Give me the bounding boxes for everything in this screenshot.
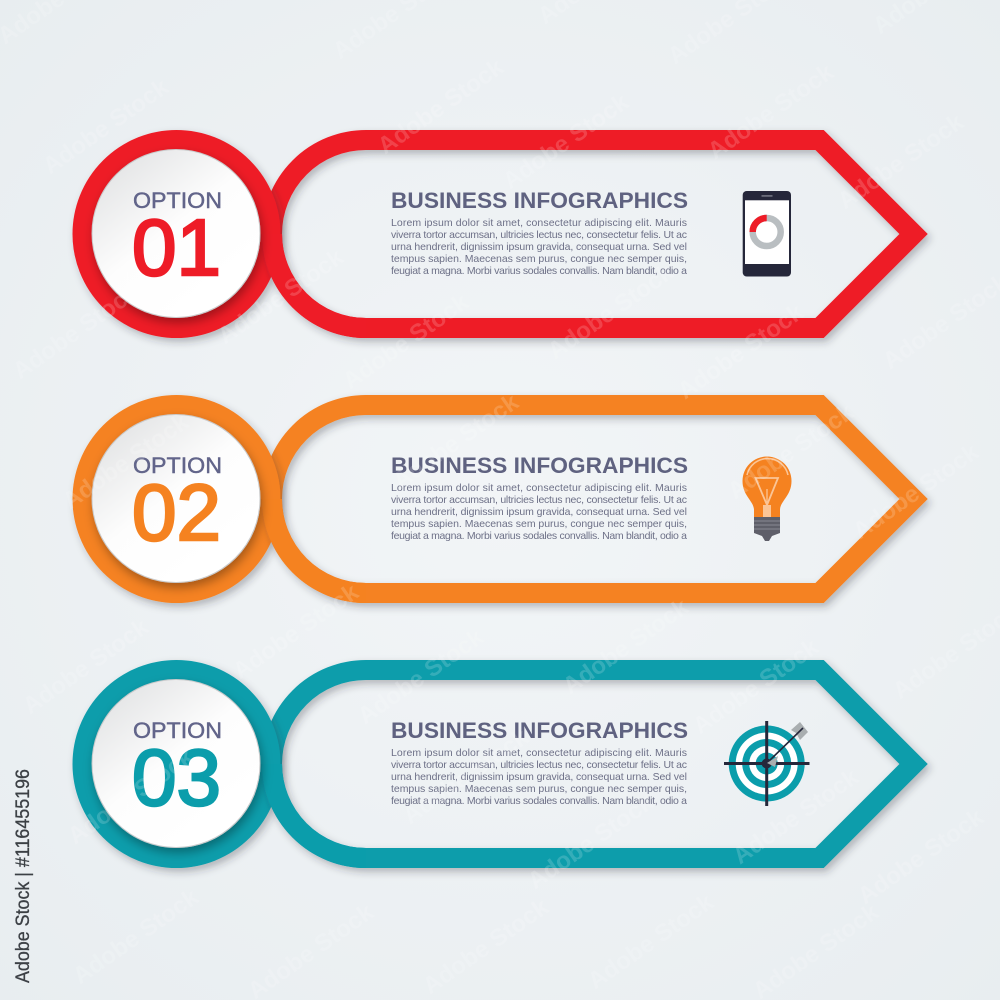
watermarks: Adobe Stock [38,73,174,180]
panel: option 03 [82,670,914,858]
heading: BUSINESS INFOGRAPHICS [391,453,688,478]
ring: teal [82,670,270,858]
white disc [92,414,260,582]
watermarks: Adobe Stock [853,803,989,910]
arrow frame: teal [272,670,914,858]
arrow overlap over ring [261,499,366,603]
watermarks: Adobe Stock [543,258,679,365]
body text: feugiat a magna. Morbi varius sodales convallis. Nam blandit, odio a [391,265,687,277]
option label: OPTION [133,718,222,743]
body text: feugiat a magna. Morbi varius sodales convallis. Nam blandit, odio a [391,795,687,807]
watermarks: Adobe Stock [213,243,349,350]
white disc [92,680,260,848]
watermarks: Adobe Stock [8,278,144,385]
arrow frame: red [272,140,914,328]
ring: red [82,140,270,328]
option number: 01 [132,203,221,292]
watermarks: Adobe Stock [848,438,984,545]
watermarks: Adobe Stock [388,388,524,495]
watermarks: Adobe Stock [703,58,839,165]
stock id text: Adobe Stock | #116455196 [13,769,34,983]
body text: tempus sapien. Maecenas sem purus, congue nec semper quis, [391,783,687,795]
watermarks: Adobe Stock [63,743,199,850]
watermarks: Adobe Stock [353,623,489,730]
body text: urna hendrerit, dignissim ipsum gravida, consequat urna. Sed vel [391,771,687,783]
ring: orange [82,405,270,593]
body text [391,482,687,542]
watermarks: Adobe Stock [688,633,824,740]
icon: smartphone with donut chart [743,191,791,276]
watermarks: Adobe Stock [583,888,719,995]
body text: Lorem ipsum dolor sit amet, consectetur adipiscing elit. Mauris [391,217,687,229]
watermarks: Adobe Stock [523,788,659,895]
body text: viverra tortor accumsan, ultricies lectus nec, consectetur felis. Ut ac [391,494,687,506]
watermarks: Adobe Stock [728,763,864,870]
arrow frame: orange [272,405,914,593]
body text: urna hendrerit, dignissim ipsum gravida, consequat urna. Sed vel [391,241,687,253]
body text: Lorem ipsum dolor sit amet, consectetur adipiscing elit. Mauris [391,747,687,759]
watermarks: Adobe Stock [558,593,694,700]
watermarks: Adobe Stock [58,408,194,515]
watermarks: Adobe Stock [228,578,364,685]
icon: light bulb [742,456,792,541]
watermarks: Adobe Stock [373,53,509,160]
panel: option 01 [82,140,914,328]
arrow overlap over ring [262,764,366,868]
heading: BUSINESS INFOGRAPHICS [391,718,688,743]
body text: feugiat a magna. Morbi varius sodales convallis. Nam blandit, odio a [391,530,687,542]
body text [391,747,687,807]
body text: tempus sapien. Maecenas sem purus, congue nec semper quis, [391,253,687,265]
watermarks: Adobe Stock [498,88,634,195]
option number: 03 [132,733,221,822]
panel: option 02 [82,405,914,593]
watermarks: Adobe Stock [673,298,809,405]
body text: tempus sapien. Maecenas sem purus, congue nec semper quis, [391,518,687,530]
icon: target with arrow [724,721,810,806]
option label: OPTION [133,453,222,478]
watermarks: Adobe Stock [68,883,204,990]
body text: urna hendrerit, dignissim ipsum gravida, consequat urna. Sed vel [391,506,687,518]
watermarks: Adobe Stock [418,893,554,1000]
watermarks: Adobe Stock [723,398,859,505]
body text [391,217,687,277]
arrow overlap over ring [261,234,366,338]
option label: OPTION [133,188,222,213]
body text: Lorem ipsum dolor sit amet, consectetur adipiscing elit. Mauris [391,482,687,494]
watermarks: Adobe Stock [833,108,969,215]
watermarks: Adobe Stock [18,613,154,720]
option number: 02 [132,468,221,557]
white disc [92,150,260,318]
infographic canvas [14,128,934,984]
body text: viverra tortor accumsan, ultricies lectus nec, consectetur felis. Ut ac [391,229,687,241]
watermarks: Adobe Stock [338,288,474,395]
watermarks: Adobe Stock [398,723,534,830]
body text: viverra tortor accumsan, ultricies lectus nec, consectetur felis. Ut ac [391,759,687,771]
heading: BUSINESS INFOGRAPHICS [391,188,688,213]
